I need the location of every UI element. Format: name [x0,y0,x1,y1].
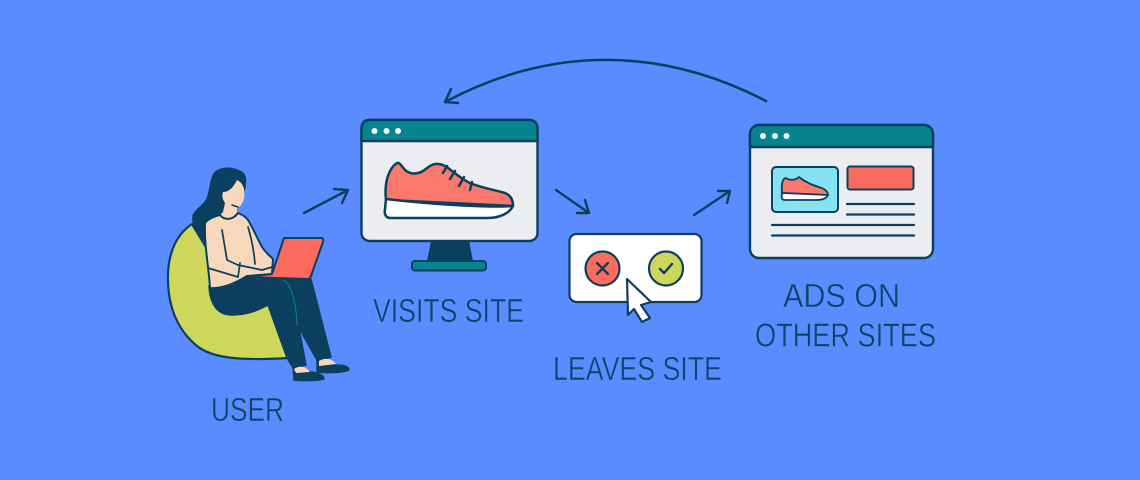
text lines [772,204,914,236]
label: ads on other sites: ADS ON [783,277,900,314]
ad image with sneaker [772,167,838,212]
arrow: site to leaves [556,190,589,213]
icon: desktop monitor [362,120,538,270]
label: user: USER [211,391,284,428]
label: ads on other sites: OTHER SITES [755,316,936,354]
monitor screen [362,120,538,241]
browser bar [362,120,538,141]
ad banner [848,166,914,190]
arrow: user to site [304,189,348,213]
beanbag [168,224,300,359]
reject button [586,252,620,286]
icon: choice dialog [570,234,702,322]
trouser seam [283,280,297,325]
monitor stand [427,241,473,261]
cursor [627,279,651,322]
icon: ad browser window [750,125,933,258]
sneaker [385,163,513,218]
arrow: return loop [445,60,766,103]
browser bar [750,125,933,147]
trousers [209,277,331,368]
shoes [293,367,324,381]
label: visits site: VISITS SITE [373,292,524,329]
sweater [205,213,273,288]
icon: user on beanbag [168,168,349,381]
laptop [247,238,323,279]
arrow: leaves to ads [694,191,730,215]
label: leaves site: LEAVES SITE [553,350,722,387]
sweater arm line [208,227,272,277]
label: ads on other sites [755,277,936,354]
face and neck [220,180,244,220]
accept button [649,252,683,286]
hair [193,168,246,242]
